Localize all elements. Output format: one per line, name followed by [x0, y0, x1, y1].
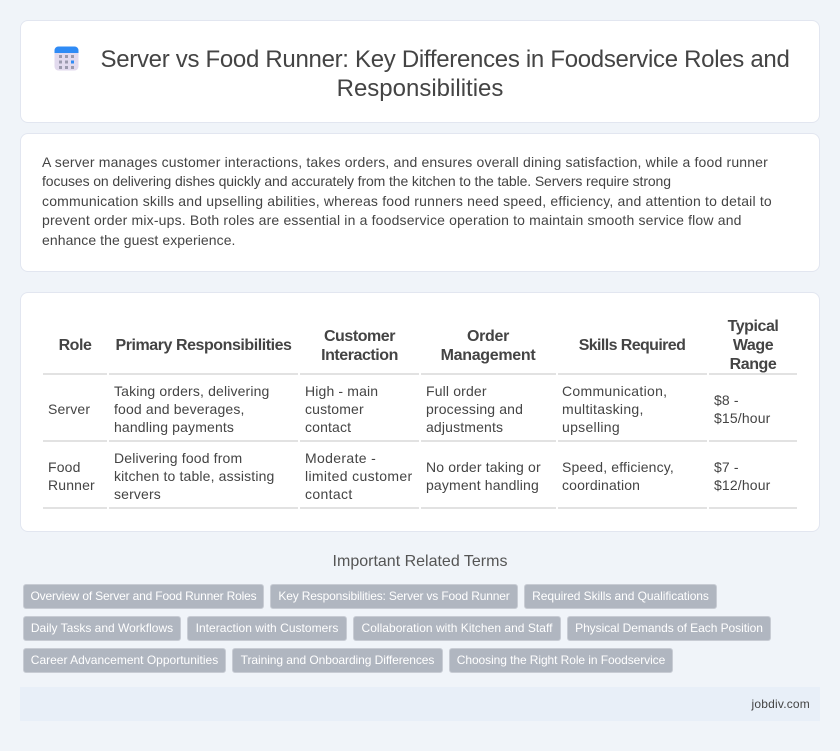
tag — [23, 616, 181, 641]
table header row: Role — [59, 337, 91, 354]
tag: Physical Demands of Each Position — [575, 621, 763, 635]
table row: food runner: Food — [48, 459, 81, 475]
table row: food runner: payment handling — [426, 477, 539, 493]
icon: calendar — [54, 46, 78, 70]
tag: Required Skills and Qualifications — [532, 589, 709, 603]
tag — [23, 648, 226, 673]
intro text: enhance the guest experience. — [42, 232, 236, 248]
table header row: Skills Required — [579, 337, 685, 354]
table header row: Interaction — [321, 347, 398, 364]
table row: server: processing and — [426, 401, 523, 417]
tag — [567, 616, 771, 641]
related terms heading: Important Related Terms — [333, 553, 507, 570]
title: Server vs Food Runner: Key Differences in Foodservice Roles and — [100, 46, 790, 73]
intro text — [42, 154, 772, 248]
tag: Interaction with Customers — [196, 621, 338, 635]
table row: food runner: No order taking or — [426, 459, 541, 475]
table row: server — [48, 383, 770, 435]
table row: server: Taking orders, delivering — [114, 383, 270, 399]
table row: food runner: servers — [114, 486, 161, 502]
table row: server: Server — [48, 401, 90, 417]
tag — [232, 648, 443, 673]
tag: Collaboration with Kitchen and Staff — [362, 621, 552, 635]
tag: Daily Tasks and Workflows — [31, 621, 173, 635]
tag — [270, 584, 518, 609]
table row: server: food and beverages, — [114, 401, 245, 417]
title — [100, 46, 790, 102]
table row: server: adjustments — [426, 419, 503, 435]
tag — [449, 648, 673, 673]
tag — [23, 584, 264, 609]
table row: food runner: $7 - — [714, 459, 739, 475]
table row: server: handling payments — [114, 419, 234, 435]
table row: server: $15/hour — [714, 410, 770, 426]
table row: server: multitasking, — [562, 401, 644, 417]
table row: food runner: $12/hour — [714, 477, 770, 493]
table row: server: $8 - — [714, 392, 739, 408]
table row: food runner: Speed, efficiency, — [562, 459, 674, 475]
table row: server: Communication, — [562, 383, 667, 399]
table row: food runner: coordination — [562, 477, 640, 493]
header card — [20, 20, 820, 123]
table row: food runner: Runner — [48, 477, 95, 493]
table row: food runner: Delivering food from — [114, 450, 242, 466]
table row: server: Full order — [426, 383, 487, 399]
intro text: prevent order mix-ups. Both roles are essential in a foodservice operation to maintain smooth service flow and — [42, 212, 742, 228]
table header row: Range — [730, 356, 776, 373]
table header row: Management — [441, 347, 535, 364]
table header row: Typical — [728, 318, 778, 335]
table row: server: contact — [305, 419, 351, 435]
table row: server: upselling — [562, 419, 620, 435]
table header row — [59, 318, 778, 373]
table header row: Customer — [324, 328, 395, 345]
intro text: focuses on delivering dishes quickly and accurately from the kitchen to the table. Servers require strong — [42, 173, 671, 189]
comparison table — [43, 318, 797, 509]
table header row: Primary Responsibilities — [116, 337, 291, 354]
tag: Key Responsibilities: Server vs Food Runner — [278, 589, 510, 603]
table row: food runner — [48, 450, 770, 502]
footer bar — [20, 687, 820, 721]
tag: Choosing the Right Role in Foodservice — [457, 653, 665, 667]
intro text: communication skills and upselling abilities, whereas food runners need speed, efficiency, and attention to detail to — [42, 193, 772, 209]
table row: food runner: kitchen to table, assisting — [114, 468, 274, 484]
table row: food runner: contact — [305, 486, 353, 502]
footer source text: jobdiv.com — [752, 697, 810, 711]
title: Responsibilities — [337, 75, 503, 102]
tag — [353, 616, 561, 641]
tag: Career Advancement Opportunities — [31, 653, 218, 667]
table row: food runner: limited customer — [305, 468, 413, 484]
comparison table card — [20, 292, 820, 532]
related terms tags — [23, 584, 771, 673]
table header row: Wage — [733, 337, 773, 354]
tag — [524, 584, 717, 609]
table row: food runner: Moderate - — [305, 450, 376, 466]
intro text: A server manages customer interactions, takes orders, and ensures overall dining satisfaction, while a food runner — [42, 154, 768, 170]
tag — [187, 616, 347, 641]
tag: Overview of Server and Food Runner Roles — [30, 589, 256, 603]
table header row: Order — [467, 328, 509, 345]
intro paragraph card — [20, 133, 820, 272]
tag: Training and Onboarding Differences — [241, 653, 434, 667]
table row: server: High - main — [305, 383, 378, 399]
table row: server: customer — [305, 401, 364, 417]
